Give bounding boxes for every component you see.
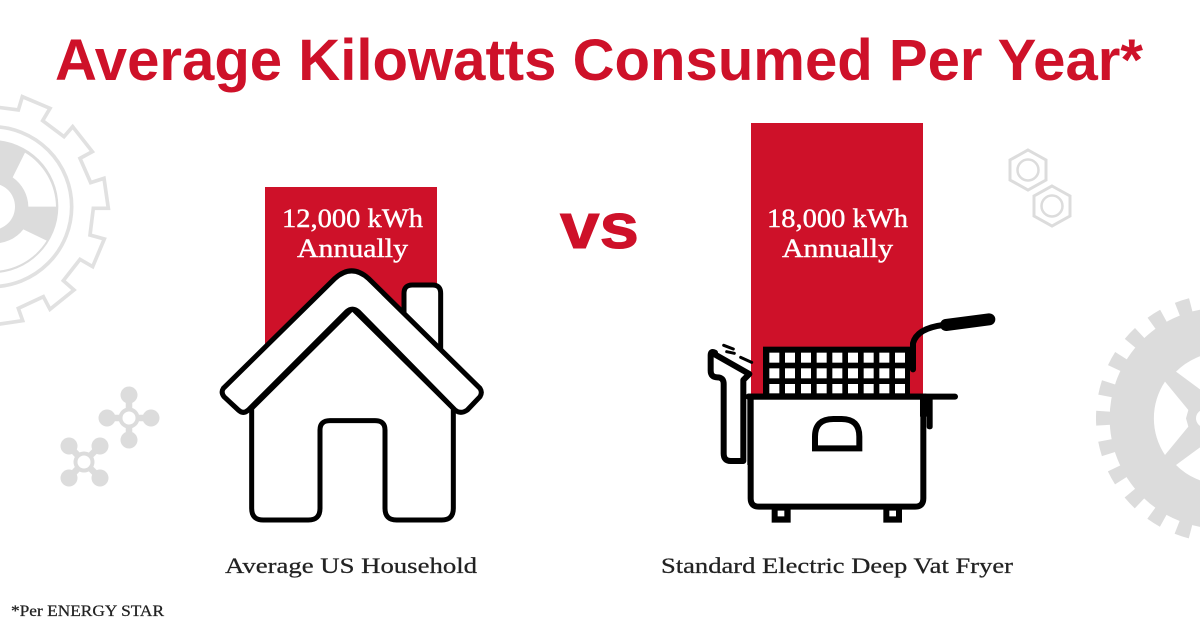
icon: solid gear right	[1103, 302, 1200, 535]
bar label: household: Annually	[297, 234, 408, 263]
bar label: fryer: Annually	[782, 234, 893, 263]
fryer spout drops	[724, 345, 752, 362]
bar label: fryer	[767, 204, 908, 263]
icon: house	[222, 271, 481, 520]
icon: hex nuts	[1010, 150, 1070, 226]
fryer body	[711, 352, 955, 507]
footnote: *Per ENERGY STAR	[11, 603, 164, 620]
vs text: vs	[560, 190, 639, 262]
bar: fryer	[751, 123, 923, 394]
bar label: household	[282, 204, 423, 263]
title: Average Kilowatts Consumed Per Year*	[55, 28, 1143, 93]
label: household: Average US Household	[225, 553, 477, 578]
bar label: household: 12,000 kWh	[282, 204, 423, 233]
fryer feet	[772, 508, 902, 523]
fryer basket	[763, 347, 910, 398]
label: fryer: Standard Electric Deep Vat Fryer	[661, 553, 1014, 578]
icon: outlined gear left	[0, 97, 108, 325]
bar label: fryer: 18,000 kWh	[767, 204, 908, 233]
bar: household	[265, 187, 437, 357]
fryer handle	[913, 319, 989, 369]
icon: molecule nodes	[60, 386, 160, 486]
icon: deep fryer	[711, 319, 989, 523]
